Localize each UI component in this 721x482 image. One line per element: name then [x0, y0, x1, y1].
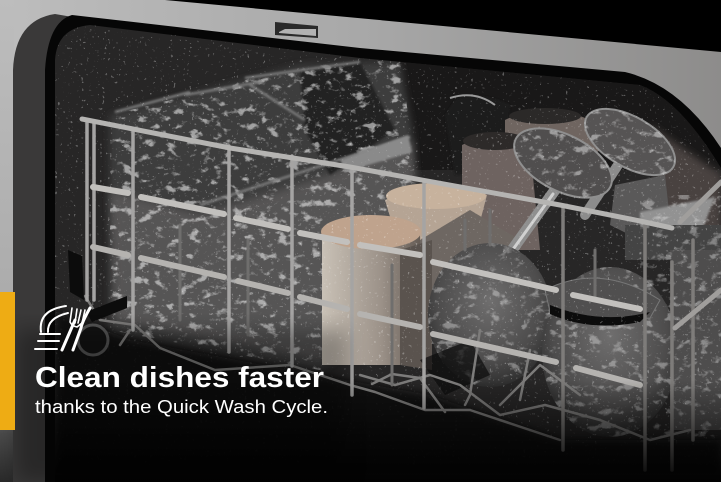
rear beige cups	[462, 108, 600, 250]
back mug	[450, 94, 496, 174]
front beige cups	[321, 183, 487, 370]
goblet stems	[512, 165, 618, 250]
short inner tines	[180, 210, 595, 385]
goblet feet	[513, 108, 676, 199]
vertical rack wires	[87, 120, 693, 470]
upper rack	[82, 119, 721, 470]
lower rack rail	[93, 247, 640, 385]
back-rack glasses	[100, 60, 430, 380]
icon: spray and cutlery	[35, 306, 90, 350]
left text shade	[16, 330, 346, 482]
side rack rails	[675, 182, 721, 328]
dark vignette	[55, 385, 721, 482]
yellow accent bar	[0, 292, 15, 430]
middle rack rail	[93, 187, 640, 309]
lower rack wires	[85, 296, 690, 440]
subheading: thanks to the Quick Wash Cycle.	[35, 397, 328, 417]
headline: Clean dishes faster	[35, 362, 324, 394]
top rack rail	[82, 119, 672, 228]
splashing glass bowls	[428, 175, 721, 445]
dark floor of the tub	[55, 310, 721, 475]
door gasket	[13, 14, 90, 482]
door latch	[275, 22, 318, 38]
back wall right tint	[652, 125, 721, 225]
rack roller wheel	[68, 250, 127, 355]
